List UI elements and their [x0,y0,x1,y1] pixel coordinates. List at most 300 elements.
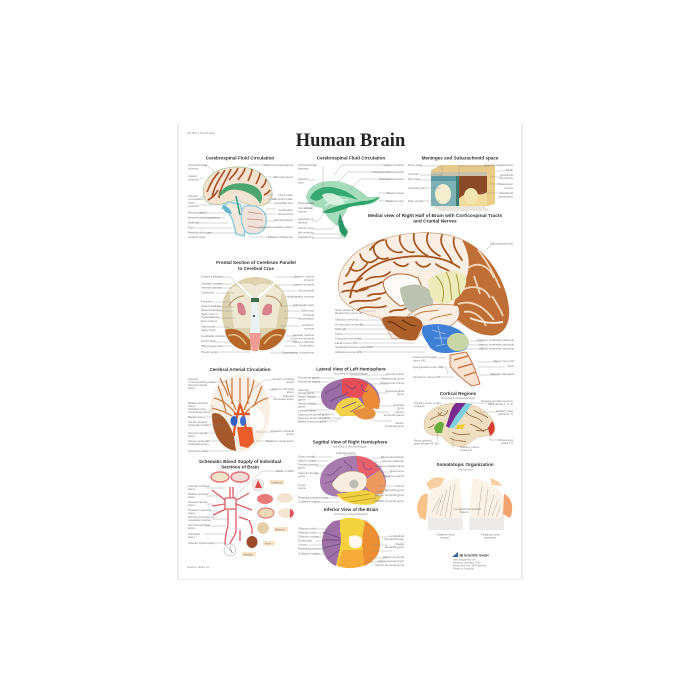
thalamus and pons pale band [406,304,460,326]
callout labels: Thalamic area [436,532,455,536]
callout labels: artery [188,487,196,491]
callout labels: Pineal nerve [201,350,217,354]
callout labels: Postcentral gyrus [382,376,405,380]
callout labels: Dentate nucleus [293,333,315,337]
callout labels: Dura mater [279,193,293,197]
callout labels: Sulcus cinguli [298,458,316,462]
callout labels [414,399,514,452]
callout labels: Orbital gyri [298,538,312,542]
callout labels: Cerebellar culmen [201,334,225,338]
callout labels: Putamen [201,300,213,304]
homunculi [417,477,512,530]
callout labels: municating artery [188,410,211,414]
callout labels: Anterior column [294,274,314,278]
callout labels: Oculomotor nerve (II) [335,311,362,315]
callout labels: Superior [283,394,294,398]
callout labels: Internal carotid [188,500,208,504]
brainstem [450,352,480,386]
callout labels: Posterior cerebral [271,429,294,433]
occipital brown lobe [453,240,509,335]
heading: Cerebral Arterial Circulation [209,367,271,372]
callout labels: Corpus callosum [201,274,223,278]
cerebellum blue [422,324,468,353]
callout labels: gyrus [298,466,306,470]
callout labels: Central canal [188,235,205,239]
callout labels: Paracentral lobule [381,455,404,459]
callout labels: Corticospinal tract [490,242,513,246]
callout labels: Medial [395,542,404,546]
callout labels: Posterior spinal artery [266,439,295,443]
callout labels: Longitudinal cerebral [454,507,481,511]
callout labels: Olfactory bulb [298,526,316,530]
callout labels: Anterior cerebral [188,484,210,488]
callout labels: Motor speech [414,438,432,442]
poster sheet [177,124,523,580]
heading: Cerebrospinal Fluid Circulation [317,156,385,160]
callout labels: Superior sagittal sinus [485,163,514,167]
callout labels: Central sulcus [386,372,405,376]
panel: cortical regions [414,391,514,452]
callout labels: artery [188,404,196,408]
panel: cerebral arterial circulation [188,367,295,453]
callout labels: Occipital gyrus [385,488,405,492]
callout labels: membrane [499,176,513,180]
callout labels [188,163,294,239]
callout labels: Inferior anterior [188,420,208,424]
callout labels: Superior temporal sulcus [298,416,331,420]
callout labels: ventricle [188,178,199,182]
callout labels: Pyramid [303,313,314,317]
callout labels: Inferior temporal gyrus [375,563,405,567]
callout labels: (sensory) [484,536,496,540]
callout labels: Medulla oblongata [490,372,514,376]
colored regions [320,456,386,505]
callout labels: Vertebral [188,532,200,536]
temporal orbital lobes [382,316,423,341]
callout labels: Supramarginal [385,389,404,393]
callout labels: Anterior [188,377,198,381]
panel: frontal section of cerebrum: to Cerebral Crus [238,266,274,271]
section illustration [222,277,288,352]
callout labels: hypothalamus [201,315,220,319]
callout labels: Pons [335,332,342,336]
panel: frontal section of cerebrum [201,260,315,354]
callout labels: Substantia [201,324,215,328]
callout labels: (motor) [440,536,449,540]
callout labels: Oculomotor nerve (III) [335,322,363,326]
callout labels: Anterior cerebral [273,377,294,381]
callout labels: Postcentral sulcus [381,381,405,385]
callout labels: (Area 17) [501,441,513,445]
callout labels: Lentiform [302,323,315,327]
callout labels [298,526,405,567]
callout labels: 3rd ventricle [298,288,314,292]
callout labels: Internal carotid [188,431,208,435]
callout labels: Middle temporal gyrus [298,420,327,424]
callout labels: nigra, Pons [201,328,216,332]
callout labels: temporal gyrus [385,424,405,428]
callout labels: Infundibular [298,206,313,210]
callout labels: of fornix [304,278,315,282]
callout labels: recess [298,210,307,214]
callout labels: Arachnoid mater [272,197,293,201]
callout labels: Olive [507,364,514,368]
callout labels [298,372,405,428]
panel: schematic blood supply: Sections of Brain [221,464,259,470]
callout labels: Internal vertebral [188,523,210,527]
heading: Lateral View of Left Hemisphere [316,366,386,372]
callout labels: Callosal sulcus [336,451,356,455]
callout labels: Claustrum [201,290,215,294]
callout labels: Midbrain [335,327,346,331]
callout labels: cerebral fissure [384,537,404,541]
peach section tags [242,480,288,556]
peach section tags: Cerebrum [271,480,283,484]
callout labels: Circle of Willis [276,469,295,473]
callout labels: Red nucleus [201,319,218,323]
callout labels: Arachnoid [500,191,513,195]
callout labels [188,377,295,453]
callout labels: Inferior temporal gyrus [375,499,405,503]
publisher logo: 3B Scientific GmbH [459,554,489,558]
callout labels: Anterior [188,194,198,198]
callout labels: Inferior colliculus [292,340,315,344]
callout labels: Decussation of pyramids [282,350,315,354]
callout labels: Dura mater [408,163,422,167]
callout labels: Optic tract of [201,312,218,316]
callout labels: Olfactory nerve (I) [335,318,358,322]
callout labels: Lateral ventricle [294,282,314,286]
callout labels: Hypoglossal nerve (XII) [413,365,443,369]
callout labels: Precuneus [390,469,405,473]
callout labels: Abducens nerve (VI) [335,350,361,354]
callout labels: artery [287,380,295,384]
callout labels: Interventricular [188,163,207,167]
callout labels: Inferior temporal gyri [377,559,404,563]
callout labels: commissure [188,197,204,201]
large brain illustration [338,233,509,386]
callout labels: Inferior horn [298,226,314,230]
callout labels: temporal gyrus [385,545,405,549]
peach section tags: Medulla [244,552,253,556]
panel: lateral view of left hemisphere: according to Vesalius/Haggar [334,372,368,376]
callout labels: gyrus [298,398,306,402]
callout labels: cerebellar artery [273,397,295,401]
callout labels: Thalamic area [481,532,500,536]
callout labels: Collateral sulcus [298,500,320,504]
callout labels: Optic tract [301,308,314,312]
callout labels: Middle cerebellar peduncle [479,346,514,350]
callout labels: Lateral horn [298,235,314,239]
callout labels: horn [298,180,304,184]
callout labels: Mesencephalon [201,308,222,312]
callout labels [188,469,295,545]
callout labels: nucleus [304,326,315,330]
callout labels: Substantia nigra [293,303,314,307]
panel: cerebrospinal fluid circulation, sagittal [188,156,294,239]
layered tissue block [431,165,495,211]
callout labels: Cerebellum [299,344,315,348]
callout labels: rectus [298,486,306,490]
callout labels: frontal gyrus [298,391,314,395]
callout labels: Optic recess [298,201,315,205]
arterial tree [212,487,252,545]
callout labels: Cerebellomedullary cistern [259,225,293,229]
callout labels: Precentral gyrus [298,376,320,380]
callout labels: Precentral sulcus [298,380,321,384]
callout labels: Subthalamic nucleus [287,294,315,298]
callout labels: Inferior [395,421,404,425]
callout labels: Posterior cerebral [188,508,211,512]
callout labels [201,274,315,354]
callout labels: Foramen interventricular [373,170,404,174]
callout labels: 4th ventricle [277,212,293,216]
callout labels: Foramen Magendie [268,235,293,239]
heading: Somatotopic Organization [436,462,494,467]
colored lobes [321,378,380,420]
callout labels: Posterior horn [386,199,404,203]
frontal and parietal sulci [350,256,460,298]
callout labels: Posterior com- [188,407,207,411]
callout labels: Medulla oblongata [188,230,212,234]
callout labels: Vestibulocochlear nerve (VIII) [335,345,373,349]
callout labels: Third [188,201,195,205]
heading: Schematic Blood Supply of Individual [199,459,281,464]
panel: meninges and subarachnoid space [408,156,514,211]
callout labels: artery [188,434,196,438]
callout labels: 4th ventricle [298,230,314,234]
callout labels: Pia mater [408,177,420,181]
callout labels [298,163,405,239]
callout labels: fissure [460,510,469,514]
callout labels: artery [188,511,196,515]
callout labels: ventricle [188,204,199,208]
callout labels: Inferior temporal gyrus [375,493,405,497]
callout labels: Cerebral vein [408,186,426,190]
callout labels: nerve (IX) [413,358,426,362]
callout labels: Superior cerebellar peduncle [477,338,514,342]
publisher logo: Design and Text: 3B Publishing [453,564,487,568]
panel: sagittal view of right hemisphere [298,440,405,505]
callout labels: Fornix brain [201,339,217,343]
callout labels: Inferior frontal [298,402,316,406]
callout labels: artery [188,495,196,499]
callout labels: Anterior spinal artery [188,541,215,545]
callout labels: Angular [394,403,404,407]
heading: Cerebrospinal Fluid Circulation [206,156,274,160]
callout labels: artery [188,535,196,539]
heading: Frontal Section of Cerebrum Parallel [216,260,296,265]
callout labels: Olfactory tract [298,530,316,534]
callout labels: communicating artery [188,380,216,384]
panel: schematic blood supply [187,459,295,569]
callout labels: Corpus callosum [382,459,405,463]
callout labels: Auditory cortex [460,445,480,449]
panel: somatotopic organization [417,462,512,570]
reference code: VR 1615 L Human Brain [187,131,216,135]
callout labels: artery [188,386,196,390]
callout labels: Pineal recess [387,191,405,195]
callout labels: Lateral [188,174,197,178]
callout labels: (Areas 5, 7) [498,412,513,416]
callout labels: of the 4th ventricle [290,336,314,340]
callout labels: Parieto-occipital sulcus [374,464,405,468]
peach section tags: Pons [265,541,272,545]
callout labels: Basilar artery [188,415,206,419]
callout labels: Uncus [298,542,307,546]
callout labels: Cranium [408,172,420,176]
callout labels: gyrus [298,404,306,408]
callout labels: Lateral sulcus [298,408,316,412]
callout labels: gyrus [397,406,405,410]
callout labels: Anterior [298,177,308,181]
panel: medial view of right half of brain: and Cranial Nerves [413,218,457,224]
callout labels: Mesencephalic aqueduct [188,216,220,220]
callout labels: Visual area [499,438,513,442]
callout labels: artery [287,432,295,436]
callout labels: (Area 4) [414,404,424,408]
publisher logo [452,552,489,570]
callout labels: Accessory nerve (XI) [413,375,440,379]
callout labels: Midbrain [188,220,199,224]
heading: Meninges and Subarachnoid space [422,156,499,160]
callout labels: Choroid plexus [274,175,294,179]
artist credit: Frank H. Netter, Inc. [187,565,210,569]
callout labels [408,163,514,203]
callout labels: Inferior posterior [188,439,209,443]
callout labels: Cerebellar tent [274,201,293,205]
callout labels: Falx cerebri [408,199,423,203]
heading: Inferior View of the Brain [324,507,378,512]
callout labels: Fornix [396,484,405,488]
callout labels: Collateral sulcus [298,552,320,556]
publisher logo: Printed in Germany [453,568,474,570]
brain map [424,403,495,447]
callout labels: Periosteum [498,182,514,186]
title: Human Brain [296,131,406,151]
callout labels: temporal sulcus [384,413,405,417]
callout labels: area (Areas 44, 45) [414,442,439,446]
brain section [203,167,272,236]
callout labels: Auditory area [496,409,513,413]
panel: cortical regions: according to Vesalius/Haggar [441,396,475,400]
callout labels [436,507,500,540]
callout labels: Sylvius [298,220,308,224]
callout labels: Lateral ventricle [384,163,404,167]
callout labels: Optic chiasma, [335,308,354,312]
callout labels: Parahippocampal gyrus [298,546,329,550]
heading: Sagittal View of Right Hemisphere [313,440,388,444]
callout labels: Pharyngeal roof [201,344,222,348]
callout labels: Cortex [504,186,514,190]
green ventricular system [306,181,380,238]
callout labels: Inferior temporal [383,555,404,559]
callout labels: Interventricular [298,163,317,167]
peach section tags: Midbrain [275,527,286,531]
callout labels: Frontal superior [298,462,318,466]
callout labels: Globus pallidus [201,304,221,308]
panel: medial view of right half of brain [335,213,514,386]
callout labels: Choroid plexus [274,218,294,222]
callout labels: Vertebral artery [188,449,208,453]
callout labels: Parahippocampal gyrus [298,496,329,500]
callout labels: granulation [499,194,513,198]
callout labels: foramen [188,166,199,170]
callout labels: Gyrus [298,483,306,487]
panel: sagittal view of right hemisphere: according to Vesalius/Haggar [333,444,367,448]
callout labels: Facial nerve (VII) [335,341,357,345]
callout labels: Trigeminal nerve (V) [335,336,361,340]
callout labels: gyrus [397,392,405,396]
callout labels: Arachnoid granulations [263,163,294,167]
callout labels: Middle cerebral [188,492,208,496]
callout labels: Primary motor cortex [414,401,441,405]
panel: somatotopic organization: (Homunculi) [458,468,472,472]
callout labels: Superior temporal gyrus [298,412,329,416]
callout labels: Cerebellum [278,208,294,212]
callout labels [335,242,514,379]
callout labels: Pons [188,226,195,230]
callout labels: Longitudinal [388,534,404,538]
callout labels: Pontine branches to [188,515,214,519]
small brain sections [211,472,294,556]
callout labels: Vagus nerve (X) [493,359,514,363]
callout labels: Calcarine sulcus [383,474,405,478]
arteries on inferior brain [210,375,270,452]
callout labels: gyrus [298,474,306,478]
callout labels: Pituitary gland [188,210,207,214]
lateral ventricle opening [383,274,428,306]
heading: Medial view of Right Half of Brain with Corticospinal Tracts [368,213,502,219]
callout labels: cerebellar artery [188,423,209,427]
callout labels: Superior frontal [298,471,318,475]
callout labels [298,451,405,504]
callout labels: Middle cerebral [188,401,208,405]
panel: cerebrospinal fluid circulation, ventricles [298,156,405,239]
callout labels: Aqueduct of [298,217,314,221]
callout labels: Gyrus cinguli [298,454,315,458]
callout labels: Inferior [395,410,404,414]
callout labels: cerebellar arteries [188,518,212,522]
panel: inferior view of the brain: according to Vesalius/Haggar [334,512,368,516]
callout labels: Inferior cerebellar peduncle [479,342,514,346]
callout labels: Superior [298,388,309,392]
callout labels: Primary somatic sensory [481,399,514,403]
colored lobes [322,518,380,568]
publisher logo: Hamburg, Germany, 2006 [453,562,481,564]
callout labels: artery [287,390,295,394]
panel: inferior view of the brain [298,507,405,568]
callout labels: Glossopharyngeal [413,355,437,359]
callout labels: artery [188,503,196,507]
callout labels: (Area 41) [460,448,472,452]
callout labels: Arachnoid [500,173,513,177]
callout labels: artery [188,526,196,530]
callout labels: Internal carotid [188,383,208,387]
corpus callosum band and yellow fornix [428,271,466,304]
panel: lateral view of left hemisphere [298,366,405,428]
publisher logo: www.3bscientific.com [453,558,476,562]
callout labels: foramen [298,166,309,170]
callout labels: Middle frontal [298,394,316,398]
callout labels: Scalp [506,168,513,172]
callout labels: Anterior choroidal [271,387,294,391]
callout labels: Caudate nucleus [201,282,223,286]
callout labels: cerebellar artery [188,442,209,446]
callout labels: Internal capsule [201,286,222,290]
callout labels: decussation [299,316,314,320]
callout labels: area (Areas 1, 2, 3) [488,402,513,406]
